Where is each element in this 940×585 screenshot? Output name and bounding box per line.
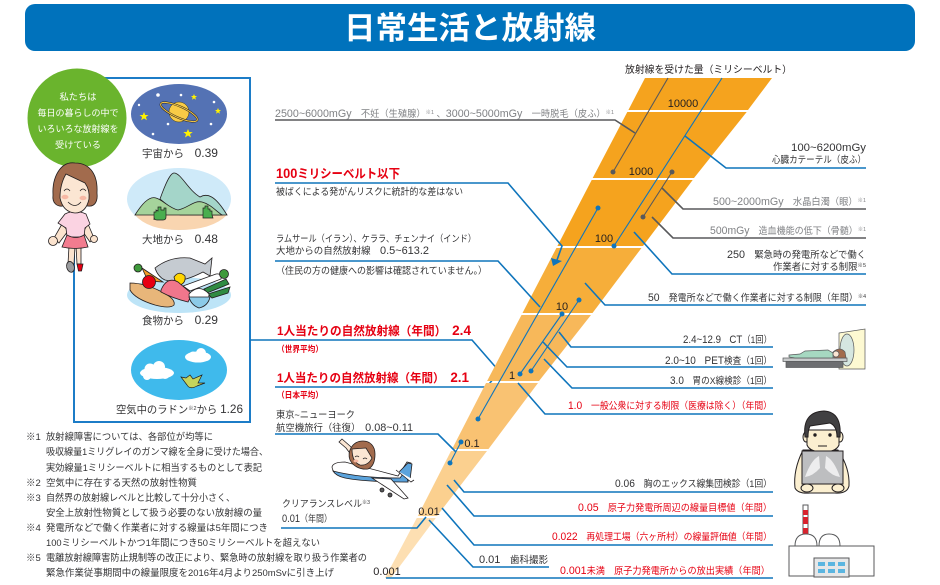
scale numbers xyxy=(373,98,698,578)
text: world average: 1人当たりの自然放射線（年間） 2.4 xyxy=(277,322,471,338)
text: from space: 宇宙から 0.39 xyxy=(142,146,218,160)
text: emergency limit: ※5 xyxy=(858,262,866,269)
text: high dose effects: ※1 xyxy=(426,109,434,116)
text: chest X-ray: 0.06 胸のエックス線集団検診（1回） xyxy=(615,478,772,490)
icon: man holding chest X-ray xyxy=(795,411,849,493)
text: radon in air: 空気中のラドン xyxy=(116,404,190,416)
footnotes: 実効線量1ミリシーベルトに相当するものとして表記 xyxy=(46,462,262,474)
scale numbers: 0.001 xyxy=(373,566,401,578)
footnotes: 吸収線量1ミリグレイのガンマ線を全身に受けた場合、 xyxy=(46,446,268,458)
text: stomach X-ray: 3.0 胃のX線検診（1回） xyxy=(670,375,772,387)
footnotes: ※5 xyxy=(26,553,41,564)
text: world average xyxy=(277,322,471,354)
text: world average: （世界平均） xyxy=(277,344,323,354)
text: cataract: ※1 xyxy=(858,197,866,204)
text: axis title: 放射線を受けた量（ミリシーベルト） xyxy=(625,63,792,76)
icon: woman on airplane xyxy=(332,439,414,499)
text: cardiac catheter xyxy=(772,142,867,166)
callout: green speech circle: 私たちは xyxy=(60,92,96,102)
scale numbers: 0.01 xyxy=(418,506,440,518)
text: CT: 2.4~12.9 CT（1回） xyxy=(683,334,772,346)
text: dental: 0.01 歯科撮影 xyxy=(479,554,548,566)
title bar xyxy=(25,4,915,51)
footnotes: 空気中に存在する天然の放射性物質 xyxy=(46,477,197,489)
icon: woman xyxy=(48,163,98,273)
text: worker limit: 50 発電所などで働く作業者に対する制限（年間） xyxy=(648,292,868,304)
text: cardiac catheter: 100~6200mGy xyxy=(791,142,867,154)
text: Tokyo to New York flight xyxy=(276,409,413,434)
text: PET: 2.0~10 PET検査（1回） xyxy=(665,355,772,367)
text: Japan average: （日本平均） xyxy=(277,390,323,400)
text: clearance level: ※3 xyxy=(362,499,370,506)
text: radon in air: 1.26 xyxy=(220,402,243,416)
chart: dose scale band xyxy=(385,78,772,578)
footnotes: 安全上放射性物質として扱う必要のない放射線の量 xyxy=(46,507,262,519)
icon: land with mountains xyxy=(127,168,231,230)
text: radon in air: ※2 xyxy=(188,405,197,412)
text: radon in air: から xyxy=(197,404,220,416)
text: from food: 食物から 0.29 xyxy=(142,313,218,327)
scale numbers: 1000 xyxy=(629,166,653,178)
scale numbers: 100 xyxy=(595,233,613,245)
footnotes: ※3 xyxy=(26,493,41,504)
footnotes: 放射線障害については、各部位が均等に xyxy=(46,431,213,443)
text: Tokyo to New York flight: 東京~ニューヨーク xyxy=(276,409,355,421)
footnotes: 発電所などで働く作業者に対する線量は5年間につき xyxy=(46,522,268,534)
text: plant release: 0.001未満 原子力発電所からの放出実績（年間） xyxy=(560,565,770,577)
icon: nuclear power plant xyxy=(789,505,874,577)
footnotes: ※2 xyxy=(26,478,41,489)
connector from box to average natural dose xyxy=(250,340,499,387)
callout: green speech circle: 毎日の暮らしの中で xyxy=(38,107,118,118)
text: under 100 millisievert xyxy=(276,165,463,198)
text: Tokyo to New York flight: 航空機旅行（往復） 0.08~0.11 xyxy=(276,422,413,434)
leader lines: gray effects xyxy=(275,78,866,238)
footnotes: 電離放射線障害防止規制等の改正により、緊急時の放射線を取り扱う作業者の xyxy=(46,552,367,564)
title bar: 日常生活と放射線 xyxy=(344,11,596,46)
icon: sky with clouds and bird xyxy=(131,340,227,400)
footnotes: 自然界の放射線レベルと比較して十分小さく、 xyxy=(46,492,235,504)
icon: food xyxy=(127,258,231,313)
icon: CT scanner xyxy=(783,329,865,369)
text: under 100 millisievert: 被ばくによる発がんリスクに統計的な差はない xyxy=(276,186,463,198)
text: blood formation: 500mGy 造血機能の低下（骨髄） xyxy=(710,225,864,237)
text: cardiac catheter: 心臓カテーテル（皮ふ） xyxy=(772,154,866,166)
text: cataract: 500~2000mGy 水晶白濁（眼） xyxy=(713,196,860,208)
text: from land: 大地から 0.48 xyxy=(142,232,218,246)
text: emergency limit: 作業者に対する制限 xyxy=(773,262,859,273)
scale numbers: 10000 xyxy=(668,98,698,110)
footnotes: 100ミリシーベルトかつ1年間につき50ミリシーベルトを超えない xyxy=(46,537,320,549)
leader lines: blue markers xyxy=(275,78,866,578)
text: reprocessing plant: 0.022 再処理工場（六ヶ所村）の線量評価値（年間） xyxy=(552,531,772,543)
icon: space with Saturn xyxy=(131,84,227,144)
text: Japan average xyxy=(277,369,469,400)
callout: green speech circle xyxy=(28,68,126,168)
panel: natural radiation sources box xyxy=(74,78,250,422)
text: high dose effects: 3000~5000mGy 一時脱毛（皮ふ） xyxy=(446,108,608,120)
text: high natural background areas: （住民の方の健康への影響は確認されていません。） xyxy=(276,265,487,277)
footnotes: ※4 xyxy=(26,523,41,534)
text: high natural background areas: 大地からの自然放射線 0.5~613.2 xyxy=(276,245,429,257)
text: high dose effects: 、 xyxy=(434,109,446,120)
callout: green speech circle: いろいろな放射線を xyxy=(38,123,118,134)
text: under 100 millisievert: 100ミリシーベルト以下 xyxy=(276,165,400,181)
text: clearance level xyxy=(282,499,370,525)
text: Japan average: 1人当たりの自然放射線（年間） 2.1 xyxy=(277,369,469,385)
text: high natural background areas: ラムサール（イラン）、ケララ、チェンナイ（インド） xyxy=(276,233,476,245)
text: clearance level: 0.01（年間） xyxy=(282,513,332,525)
text: clearance level: クリアランスレベル xyxy=(282,499,367,510)
text: high natural background areas xyxy=(276,233,487,277)
text: plant target: 0.05 原子力発電所周辺の線量目標値（年間） xyxy=(578,502,772,514)
callout: green speech circle: 受けている xyxy=(55,139,101,150)
scale numbers: 10 xyxy=(556,301,568,313)
footnotes: ※1 xyxy=(26,432,41,443)
text: emergency limit xyxy=(727,249,866,273)
footnotes: 緊急作業従事期間中の線量限度を2016年4月より250mSvに引き上げ xyxy=(46,567,334,579)
text: high dose effects: ※1 xyxy=(606,109,614,116)
scale numbers: 0.1 xyxy=(464,438,480,450)
footnotes xyxy=(26,431,367,579)
text: worker limit: ※4 xyxy=(858,293,866,300)
text: public limit: 1.0 一般公衆に対する制限（医療は除く）（年間） xyxy=(568,400,772,412)
text: emergency limit: 250 緊急時の発電所などで働く xyxy=(727,249,866,261)
scale numbers: 1 xyxy=(509,370,515,382)
text: high dose effects: 2500~6000mGy 不妊（生殖腺） xyxy=(275,108,428,120)
text: blood formation: ※1 xyxy=(858,226,866,233)
